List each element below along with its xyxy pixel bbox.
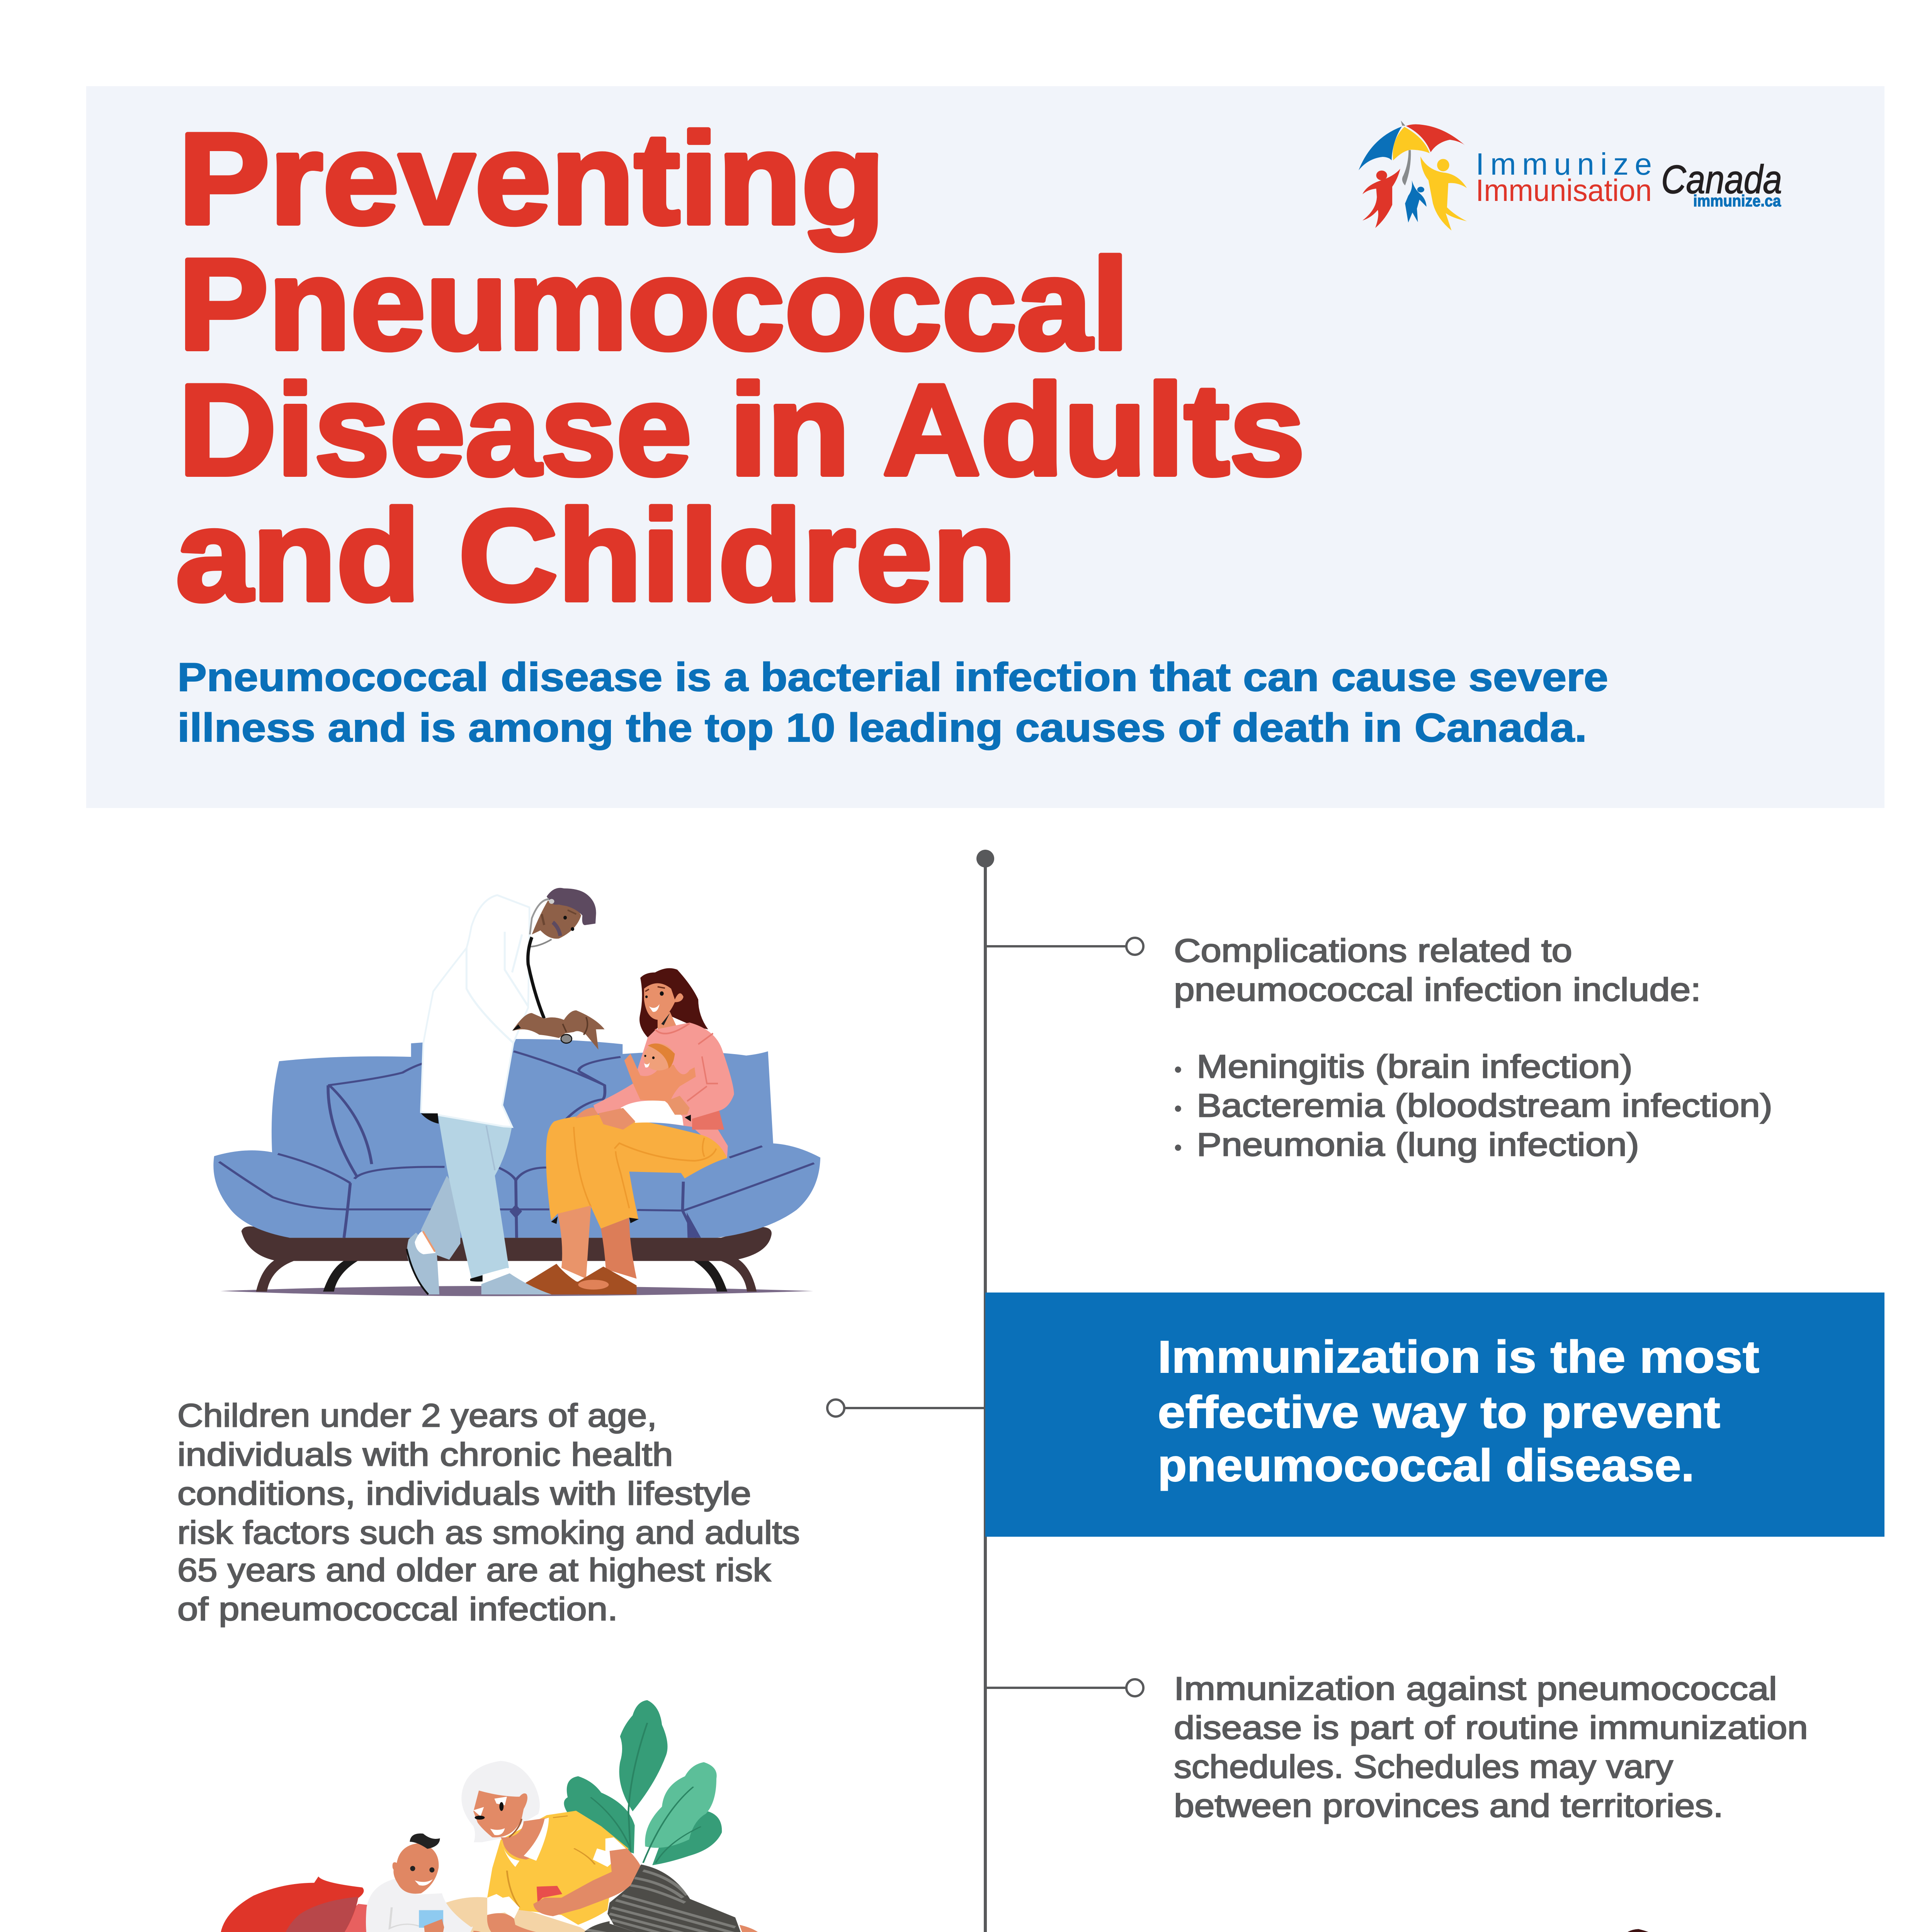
sofa — [213, 1039, 820, 1296]
text block: complications: • — [1175, 1059, 1182, 1080]
woman holding baby — [526, 968, 734, 1294]
text block: complications: Pneumonia (lung infection) — [1197, 1126, 1639, 1163]
doctor with stethoscope — [406, 888, 605, 1294]
text block: complications: Bacteremia (bloodstream infection) — [1197, 1087, 1772, 1124]
text block: who is at risk: Children under 2 years of age, — [177, 1397, 657, 1434]
illustration: grandmother and child playing with blocks on rug — [194, 1700, 791, 1932]
rug — [194, 1897, 700, 1932]
callout: immunization is the most effective — [985, 1293, 1884, 1537]
text block: complications: Meningitis (brain infection) — [1197, 1048, 1633, 1085]
title: and Children — [176, 483, 1016, 628]
logo: Immunize Canada — [1359, 121, 1782, 231]
text block: complications: • — [1175, 1098, 1182, 1119]
text block: who is at risk: individuals with chronic health — [177, 1436, 673, 1473]
text block: complications: Complications related to — [1174, 932, 1572, 969]
panel: header — [86, 86, 1884, 808]
logo: Immunize Canada: immunize.ca — [1693, 192, 1781, 210]
subtitle — [177, 655, 1608, 750]
text block: who is at risk: 65 years and older are at highest risk — [177, 1552, 771, 1588]
illustration: doctor examining baby on sofa — [213, 888, 820, 1296]
text block: complications — [1174, 932, 1772, 1163]
text block: who is at risk — [177, 1397, 800, 1627]
subtitle: Pneumococcal disease is a bacterial infection that can cause severe — [177, 655, 1608, 700]
logo: Immunize Canada: Canada — [1661, 157, 1782, 202]
text block: complications: • — [1175, 1137, 1182, 1158]
text block: routine schedules — [1174, 1670, 1808, 1824]
text block: routine schedules: schedules. Schedules may vary — [1174, 1748, 1673, 1785]
grandmother — [461, 1761, 791, 1932]
connector: risk groups — [827, 1400, 985, 1417]
timeline: vertical line with end dots — [976, 850, 994, 1932]
text block: routine schedules: between provinces and territories. — [1174, 1787, 1723, 1824]
pillows, child, blocks, plant — [214, 1700, 722, 1932]
text block: who is at risk: of pneumococcal infection. — [177, 1591, 618, 1627]
logo: Immunize Canada: Immunisation — [1476, 173, 1652, 207]
title: Pneumococcal — [179, 232, 1129, 376]
title: Disease in Adults — [179, 357, 1305, 502]
illustration: doctor and nurse standing — [1604, 1929, 1773, 1932]
icon: umbrella and three figures — [1359, 121, 1467, 231]
title: Preventing — [179, 106, 885, 252]
connector: routine schedules — [985, 1679, 1143, 1696]
text block: who is at risk: conditions, individuals with lifestyle — [177, 1475, 751, 1512]
callout: immunization is the most effective: Immunization is the most — [1158, 1332, 1759, 1383]
subtitle: illness and is among the top 10 leading causes of death in Canada. — [177, 706, 1587, 750]
text block: routine schedules: disease is part of routine immunization — [1174, 1709, 1808, 1746]
callout: immunization is the most effective: pneumococcal disease. — [1158, 1440, 1694, 1491]
text block: who is at risk: risk factors such as smoking and adults — [177, 1514, 800, 1551]
logo: Immunize Canada: Immunize — [1476, 147, 1652, 181]
callout: immunization is the most effective: effective way to prevent — [1158, 1387, 1720, 1438]
title — [176, 106, 1305, 628]
connector: complications — [985, 938, 1143, 955]
text block: complications: pneumococcal infection include: — [1174, 971, 1701, 1008]
text block: routine schedules: Immunization against pneumococcal — [1174, 1670, 1777, 1707]
